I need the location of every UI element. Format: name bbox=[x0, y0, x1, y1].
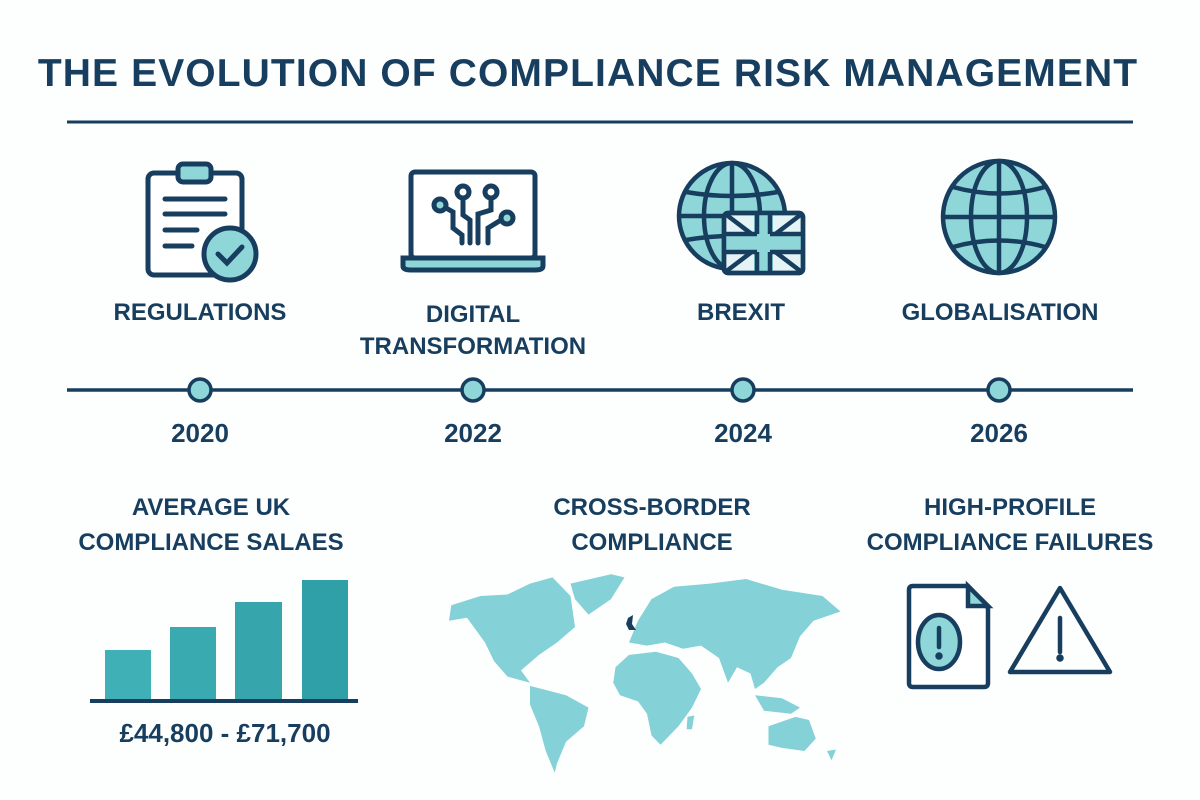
icon: warning triangle bbox=[1010, 588, 1110, 672]
heading: failures bbox=[867, 494, 1153, 556]
year labels: 2020 bbox=[171, 418, 229, 448]
label: brexit: BREXIT bbox=[697, 299, 785, 326]
label: digital transformation: TRANSFORMATION bbox=[360, 333, 586, 360]
title: THE EVOLUTION OF COMPLIANCE RISK MANAGEMENT bbox=[38, 52, 1138, 95]
timeline bbox=[67, 379, 1133, 401]
salary range: £44,800 - £71,700 bbox=[119, 718, 331, 748]
icon: UK marker bbox=[626, 615, 636, 630]
year labels: 2024 bbox=[714, 418, 772, 448]
year labels bbox=[171, 418, 1028, 448]
label: regulations: REGULATIONS bbox=[114, 299, 286, 326]
heading: salaries: AVERAGE UK bbox=[132, 494, 290, 521]
heading: failures: HIGH-PROFILE bbox=[924, 494, 1096, 521]
heading: cross-border bbox=[553, 494, 751, 556]
label: globalisation: GLOBALISATION bbox=[902, 299, 1098, 326]
bar chart bbox=[90, 580, 358, 701]
heading: salaries bbox=[78, 494, 344, 556]
label: digital transformation: DIGITAL bbox=[426, 301, 520, 328]
icon: globe bbox=[943, 161, 1055, 273]
world map bbox=[449, 574, 840, 773]
heading: cross-border: COMPLIANCE bbox=[571, 529, 733, 556]
icon: document alert bbox=[909, 586, 988, 687]
heading: failures: COMPLIANCE FAILURES bbox=[867, 529, 1153, 556]
label: digital transformation bbox=[360, 301, 586, 360]
heading: cross-border: CROSS-BORDER bbox=[553, 494, 751, 521]
icon: laptop bbox=[403, 172, 543, 270]
year labels: 2022 bbox=[444, 418, 502, 448]
heading: salaries: COMPLIANCE SALAES bbox=[78, 529, 344, 556]
icon: globe with UK flag bbox=[679, 163, 803, 273]
year labels: 2026 bbox=[970, 418, 1028, 448]
icon: clipboard bbox=[148, 164, 256, 280]
